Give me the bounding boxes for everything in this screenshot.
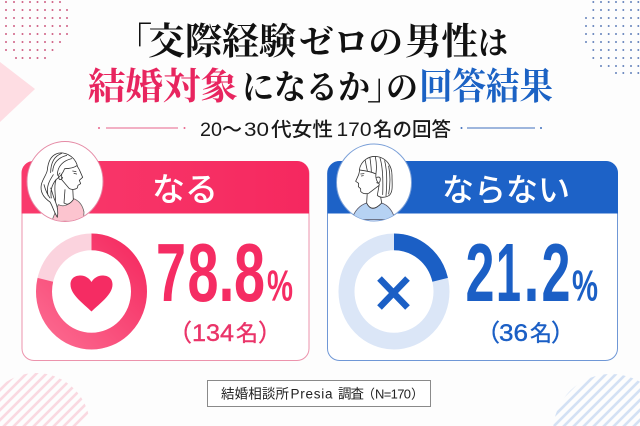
count: 134 [192,320,234,347]
percentage: 8 [234,226,265,319]
subtitle: 代女性 [271,119,333,141]
panel header [22,161,309,214]
decoration: blue striped circle [553,374,640,426]
subtitle: 名の回答 [373,118,451,141]
count: （ [168,320,192,347]
subtitle: 30 [244,119,269,141]
panel body [328,162,618,360]
title: 回答結果 [419,66,553,108]
count: （ [476,320,500,347]
title: の [386,71,418,107]
percentage: . [218,226,234,319]
source note: N=170 [375,386,411,402]
source note: （ [362,386,375,402]
panel: なる [22,161,309,360]
subtitle: ～ [222,119,242,141]
icon: woman with bob hair [336,144,412,221]
count: ） [258,320,282,347]
title: になるか [242,70,370,107]
percentage: 2 [466,226,494,319]
decoration: pink striped circle [0,373,88,426]
source note [208,380,430,406]
panel: ならない [328,161,618,360]
title: 「 [115,21,152,63]
title: は [478,25,508,61]
percentage: 2 [542,226,570,319]
source note: 調査 [338,386,364,402]
count: ） [551,320,575,347]
subtitle: 20 [200,119,222,141]
icon: heart [70,276,112,312]
donut chart [346,242,442,341]
title: 」 [367,67,404,108]
icon: woman with long hair [27,142,103,222]
title: ゼロの [299,25,403,62]
decoration: pink triangle [0,62,35,122]
header label: ならない [442,172,570,208]
count: 名 [530,321,552,346]
percentage: 1 [496,226,521,319]
percentage: 7 [156,226,186,319]
header label: なる [152,171,218,208]
title: 結婚対象 [88,66,238,108]
source note: Presia [290,386,333,402]
panel header [328,161,618,214]
source note: ） [411,386,424,402]
decoration: pink dots [5,1,68,59]
panel body [22,162,309,360]
percent sign: % [267,262,293,310]
donut chart [44,242,139,341]
title: 男性 [405,21,478,63]
subtitle: 170 [336,119,372,141]
decoration: blue dots [585,1,639,74]
icon: cross [380,278,408,308]
percentage: . [524,226,540,319]
subtitle [98,118,542,141]
title [88,21,553,108]
source note: 結婚相談所 [221,386,290,402]
count: 名 [236,321,258,346]
title: 交際経験 [148,21,296,63]
percentage: 8 [188,226,218,319]
percent sign: % [572,262,598,310]
count: 36 [499,320,528,347]
